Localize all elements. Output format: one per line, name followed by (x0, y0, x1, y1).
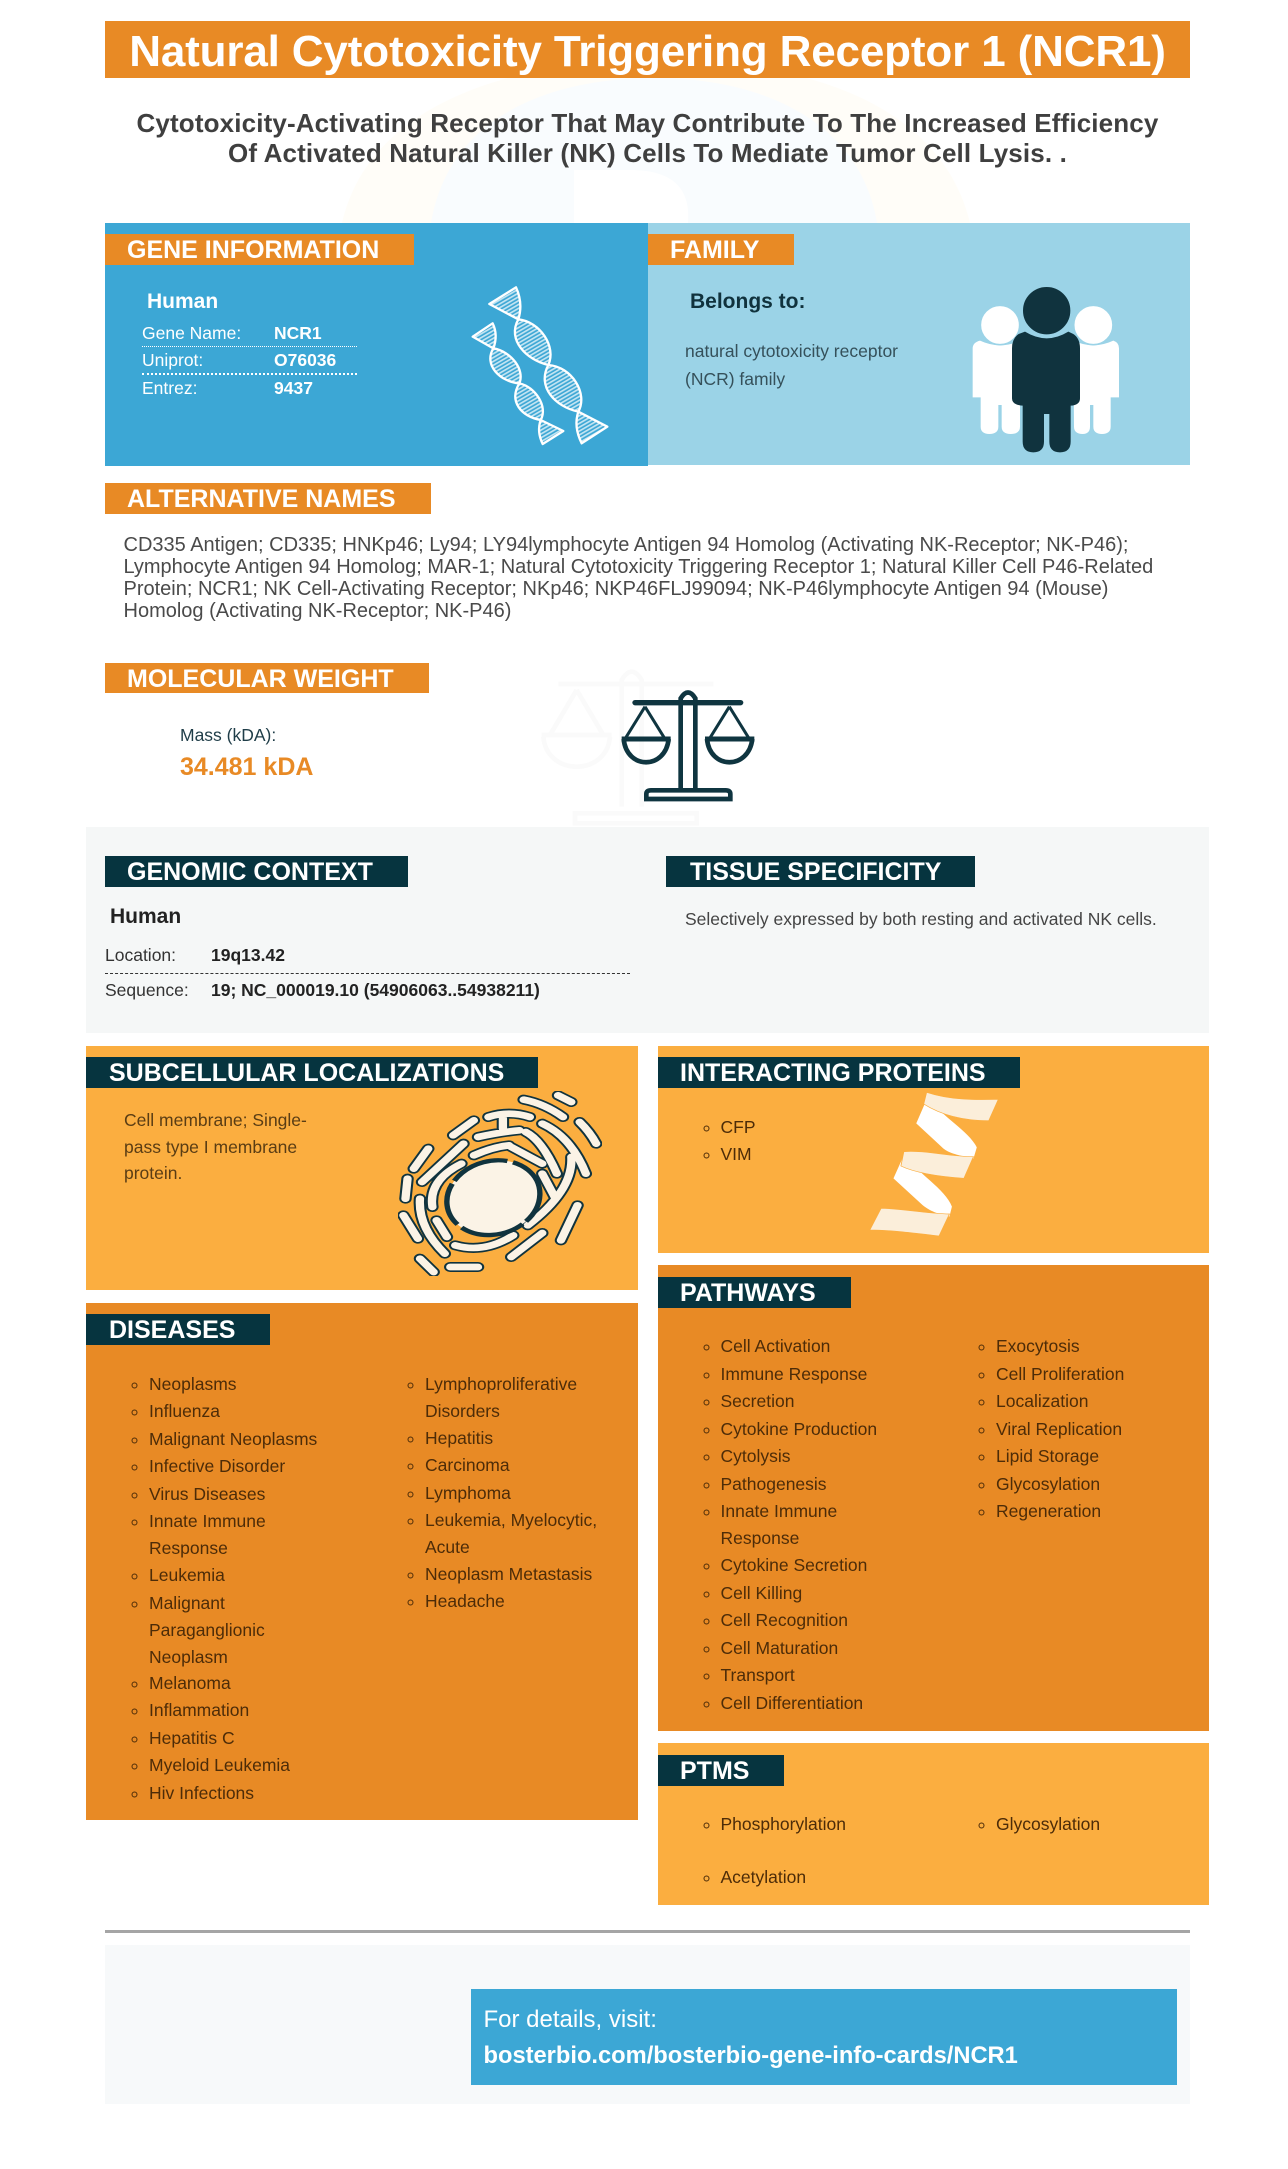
panel: genomic context and tissue specificity (86, 827, 1209, 1033)
localization text: Cell membrane; Single- (124, 1110, 307, 1130)
list: diseases column 1: Influenza (149, 1400, 220, 1420)
list: pathways column 2: Exocytosis (996, 1336, 1080, 1356)
icon: cell (398, 1091, 602, 1276)
gene table: NCR1 (274, 323, 322, 343)
list: PTMs column 1: Acetylation (720, 1866, 806, 1886)
heading: pathways: PATHWAYS (680, 1279, 816, 1307)
mass value: 34.481 kDA (180, 753, 313, 781)
list: pathways column 1 (704, 1336, 877, 1713)
subtitle: Cytotoxicity-Activating Receptor That May Contribute To The Increased Efficiency (136, 108, 1158, 138)
list: pathways column 1: Cytolysis (720, 1446, 791, 1466)
list: pathways column 2: Lipid Storage (996, 1446, 1099, 1466)
list: diseases column 1: Malignant (149, 1592, 225, 1612)
list: pathways column 1: Cytokine Production (720, 1419, 877, 1439)
list: PTMs column 2: Glycosylation (996, 1814, 1100, 1834)
list: diseases column 2: Acute (425, 1536, 470, 1556)
gene table (142, 323, 357, 398)
family text (685, 341, 898, 389)
list: interacting proteins: CFP (720, 1117, 756, 1137)
panel: PTMs (658, 1743, 1209, 1905)
icon: balance scale (621, 690, 755, 802)
list: diseases column 1: Paraganglionic (149, 1620, 265, 1640)
mass value (180, 725, 313, 781)
heading: PTMs: PTMS (680, 1757, 749, 1785)
heading: PTMs (658, 1755, 784, 1786)
species label: Human (147, 290, 218, 313)
heading: family: FAMILY (670, 236, 759, 264)
localization text: pass type I membrane (124, 1137, 297, 1157)
list: diseases column 2: Headache (425, 1590, 505, 1610)
genomic table: 19q13.42 (211, 945, 285, 965)
heading: gene information: GENE INFORMATION (127, 236, 379, 264)
heading: family (648, 234, 794, 265)
list: diseases column 1: Hiv Infections (149, 1782, 254, 1802)
list: diseases column 2: Leukemia, Myelocytic, (425, 1510, 597, 1530)
gene table: O76036 (274, 350, 336, 370)
list: pathways column 1: Cell Differentiation (720, 1693, 863, 1713)
list: diseases column 1: Myeloid Leukemia (149, 1754, 290, 1774)
genomic table: Sequence: (105, 980, 189, 1000)
list: diseases column 1: Inflammation (149, 1700, 249, 1720)
list: diseases column 1: Malignant Neoplasms (149, 1428, 317, 1448)
heading: alternative names: ALTERNATIVE NAMES (127, 485, 396, 513)
list: PTMs column 1: Phosphorylation (720, 1814, 846, 1834)
subtitle: Of Activated Natural Killer (NK) Cells To Mediate Tumor Cell Lysis. . (228, 138, 1067, 168)
list: diseases column 1: Response (149, 1538, 228, 1558)
list: pathways column 2: Glycosylation (996, 1474, 1100, 1494)
genomic table: 19; NC_000019.10 (54906063..54938211) (211, 980, 540, 1000)
list: diseases column 2 (408, 1374, 597, 1610)
list: diseases column 1: Infective Disorder (149, 1456, 285, 1476)
panel: family (648, 223, 1190, 465)
list: pathways column 1: Cytokine Secretion (720, 1554, 867, 1574)
list: pathways column 2: Localization (996, 1391, 1088, 1411)
list: diseases column 2: Disorders (425, 1400, 500, 1420)
list: pathways column 2: Regeneration (996, 1501, 1101, 1521)
localization text: protein. (124, 1163, 182, 1183)
genomic table: Location: (105, 945, 176, 965)
list: diseases column 1 (132, 1374, 317, 1802)
list: diseases column 1: Neoplasm (149, 1646, 228, 1666)
list: pathways column 1: Innate Immune (720, 1501, 837, 1521)
list: pathways column 2 (978, 1336, 1124, 1521)
list: pathways column 1: Secretion (720, 1391, 794, 1411)
list: pathways column 1: Pathogenesis (720, 1474, 827, 1494)
mass value: Mass (kDA): (180, 725, 276, 745)
genomic species label: Human (110, 905, 181, 928)
gene table: Gene Name: (142, 323, 241, 343)
list: diseases column 1: Hepatitis C (149, 1728, 235, 1748)
callout: details link: For details, visit: (484, 2006, 657, 2033)
gene table: 9437 (274, 378, 313, 398)
list: diseases column 1: Virus Diseases (149, 1484, 265, 1504)
panel: interacting proteins (658, 1046, 1209, 1253)
title: Natural Cytotoxicity Triggering Receptor 1 (NCR1) (129, 27, 1166, 76)
icon: DNA helix (472, 286, 608, 446)
list: diseases column 1: Leukemia (149, 1564, 225, 1584)
genomic table (105, 945, 630, 1000)
list: pathways column 1: Transport (720, 1665, 795, 1685)
alternative names text: Lymphocyte Antigen 94 Homolog; MAR-1; Natural Cytotoxicity Triggering Receptor 1; Natural Killer Cell P46-Related (124, 556, 1153, 578)
list: interacting proteins (704, 1117, 756, 1164)
heading: interacting proteins: INTERACTING PROTEINS (680, 1059, 986, 1087)
panel: pathways (658, 1265, 1209, 1731)
list: pathways column 1: Cell Recognition (720, 1610, 848, 1630)
tissue text: Selectively expressed by both resting and activated NK cells. (685, 909, 1157, 929)
list: pathways column 2: Viral Replication (996, 1419, 1122, 1439)
alternative names text: Homolog (Activating NK-Receptor; NK-P46) (124, 600, 511, 622)
gene table: Entrez: (142, 378, 197, 398)
panel: diseases (86, 1303, 638, 1820)
panel: subcellular localizations (86, 1046, 638, 1290)
list: pathways column 1: Cell Killing (720, 1582, 802, 1602)
list: pathways column 1: Immune Response (720, 1364, 867, 1384)
list: diseases column 2: Hepatitis (425, 1428, 493, 1448)
family text: natural cytotoxicity receptor (685, 341, 898, 361)
icon: protein helix (870, 1092, 998, 1236)
list: pathways column 2: Cell Proliferation (996, 1364, 1124, 1384)
background watermark (330, 50, 990, 225)
panel: footer (105, 1945, 1190, 2104)
list: diseases column 2: Neoplasm Metastasis (425, 1564, 592, 1584)
family text: (NCR) family (685, 369, 785, 389)
list: diseases column 2: Carcinoma (425, 1454, 510, 1474)
list: diseases column 1: Innate Immune (149, 1510, 266, 1530)
alternative names text: CD335 Antigen; CD335; HNKp46; Ly94; LY94lymphocyte Antigen 94 Homolog (Activating NK-Receptor; NK-P46); (124, 534, 1128, 556)
list: diseases column 1: Neoplasms (149, 1374, 237, 1394)
list: pathways column 1: Cell Activation (720, 1336, 830, 1356)
heading: subcellular localizations: SUBCELLULAR LOCALIZATIONS (109, 1059, 504, 1087)
heading: pathways (658, 1277, 851, 1308)
heading: molecular weight: MOLECULAR WEIGHT (127, 665, 394, 693)
icon: people (972, 287, 1119, 452)
heading: genomic context: GENOMIC CONTEXT (127, 858, 373, 886)
subtitle (136, 108, 1158, 168)
heading: diseases: DISEASES (109, 1316, 235, 1344)
callout: details link (471, 1989, 1177, 2085)
list: pathways column 1: Response (720, 1528, 799, 1548)
list: diseases column 2: Lymphoproliferative (425, 1374, 577, 1394)
heading: diseases (86, 1314, 270, 1345)
gene table: Uniprot: (142, 350, 203, 370)
heading: tissue specificity: TISSUE SPECIFICITY (690, 858, 941, 886)
alternative names text: Protein; NCR1; NK Cell-Activating Receptor; NKp46; NKP46FLJ99094; NK-P46lymphocyte Antigen 94 (Mouse) (124, 578, 1108, 600)
panel: gene information (105, 223, 648, 466)
alternative names text (124, 534, 1153, 622)
list: PTMs column 1 (704, 1814, 846, 1886)
callout: details link: bosterbio.com/bosterbio-gene-info-cards/NCR1 (484, 2043, 1018, 2069)
list: diseases column 2: Lymphoma (425, 1482, 511, 1502)
belongs to label: Belongs to: (690, 290, 806, 313)
list: diseases column 1: Melanoma (149, 1672, 231, 1692)
list: pathways column 1: Cell Maturation (720, 1638, 838, 1658)
list: interacting proteins: VIM (720, 1144, 752, 1164)
localization text (124, 1110, 307, 1183)
